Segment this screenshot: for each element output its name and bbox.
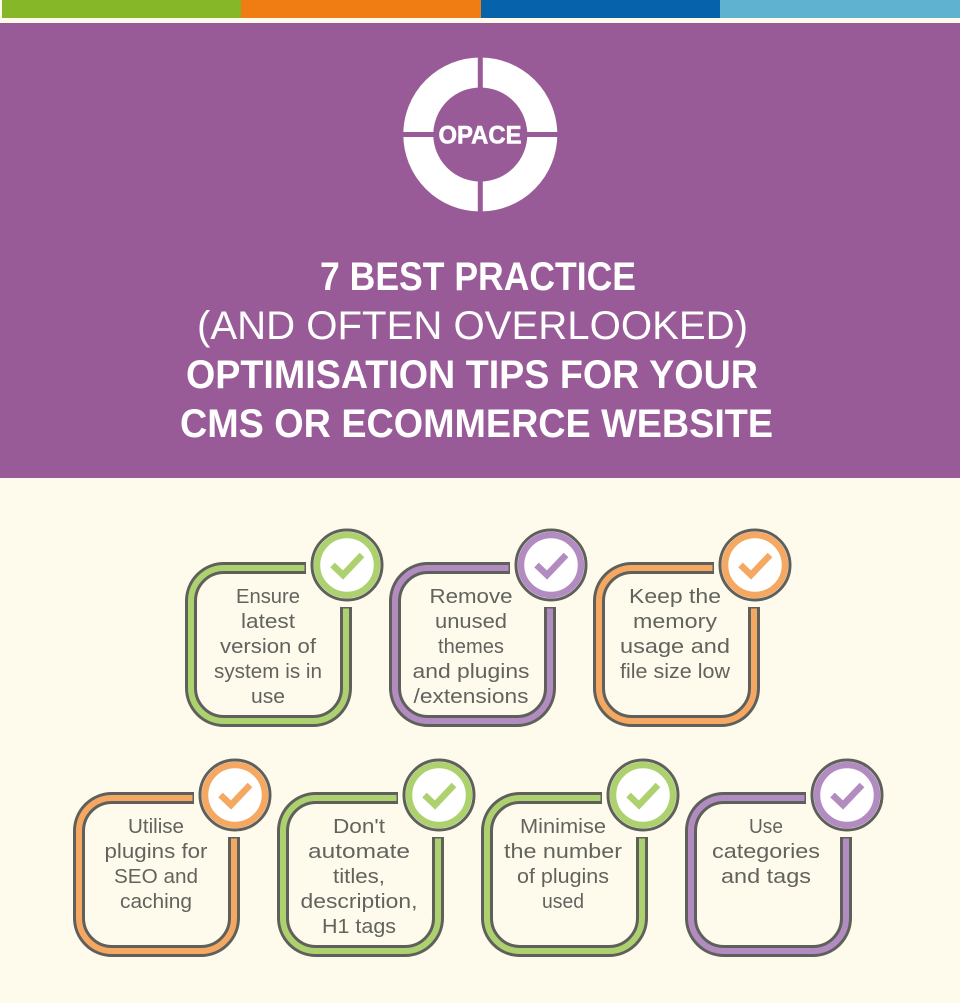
title: 7 BEST PRACTICE bbox=[320, 255, 636, 299]
tip card: categories and tags: categories bbox=[712, 840, 820, 863]
tip card: don't automate bbox=[283, 760, 474, 951]
tip card: don't automate: titles, bbox=[333, 865, 385, 888]
tip card: memory usage bbox=[599, 530, 790, 721]
title: OPTIMISATION TIPS FOR YOUR bbox=[186, 353, 758, 397]
tip card: latest version bbox=[191, 530, 382, 721]
tip card: memory usage: file size low bbox=[620, 660, 730, 683]
tip card: plugins for SEO: plugins for bbox=[104, 840, 208, 863]
title bbox=[180, 255, 773, 446]
tip card: minimise plugins: of plugins bbox=[517, 865, 609, 888]
tip card: plugins for SEO: caching bbox=[120, 890, 192, 913]
tip card: minimise plugins: Minimise bbox=[520, 815, 606, 838]
tip card: minimise plugins: the number bbox=[504, 840, 622, 863]
tip card: latest version: use bbox=[251, 685, 285, 708]
tip card: remove unused: Remove bbox=[430, 585, 512, 608]
tip card: remove unused: and plugins bbox=[412, 660, 530, 683]
tip card: minimise plugins bbox=[487, 760, 678, 951]
tip card: categories and tags bbox=[691, 760, 882, 951]
tip card: remove unused: /extensions bbox=[414, 685, 528, 708]
title: (AND OFTEN OVERLOOKED) bbox=[197, 304, 748, 348]
logo bbox=[400, 55, 560, 215]
tip card: don't automate: H1 tags bbox=[322, 915, 396, 938]
tip card: minimise plugins: used bbox=[542, 890, 584, 913]
tip card: memory usage: usage and bbox=[620, 635, 730, 658]
tip card: plugins for SEO: Utilise bbox=[128, 815, 184, 838]
tip card: plugins for SEO bbox=[79, 760, 270, 951]
tip card: don't automate: description, bbox=[300, 890, 418, 913]
tip card: categories and tags: Use bbox=[749, 815, 783, 838]
tip card: categories and tags: and tags bbox=[721, 865, 811, 888]
tip card: memory usage: memory bbox=[633, 610, 718, 633]
tip card: remove unused bbox=[395, 530, 586, 721]
tip card: remove unused: unused bbox=[435, 610, 507, 633]
colour bar bbox=[2, 0, 960, 18]
header panel bbox=[0, 23, 960, 478]
tip card: latest version: version of bbox=[220, 635, 316, 658]
tip card: latest version: Ensure bbox=[236, 585, 300, 608]
tip card: plugins for SEO: SEO and bbox=[114, 865, 198, 888]
title: CMS OR ECOMMERCE WEBSITE bbox=[180, 402, 773, 446]
tip card: don't automate: automate bbox=[308, 840, 410, 863]
logo: OPACE bbox=[438, 122, 522, 150]
tip card: latest version: latest bbox=[241, 610, 295, 633]
tip card: latest version: system is in bbox=[214, 660, 322, 683]
tip card: remove unused: themes bbox=[438, 635, 504, 658]
tip card: don't automate: Don't bbox=[333, 815, 385, 838]
tip card: memory usage: Keep the bbox=[629, 585, 721, 608]
